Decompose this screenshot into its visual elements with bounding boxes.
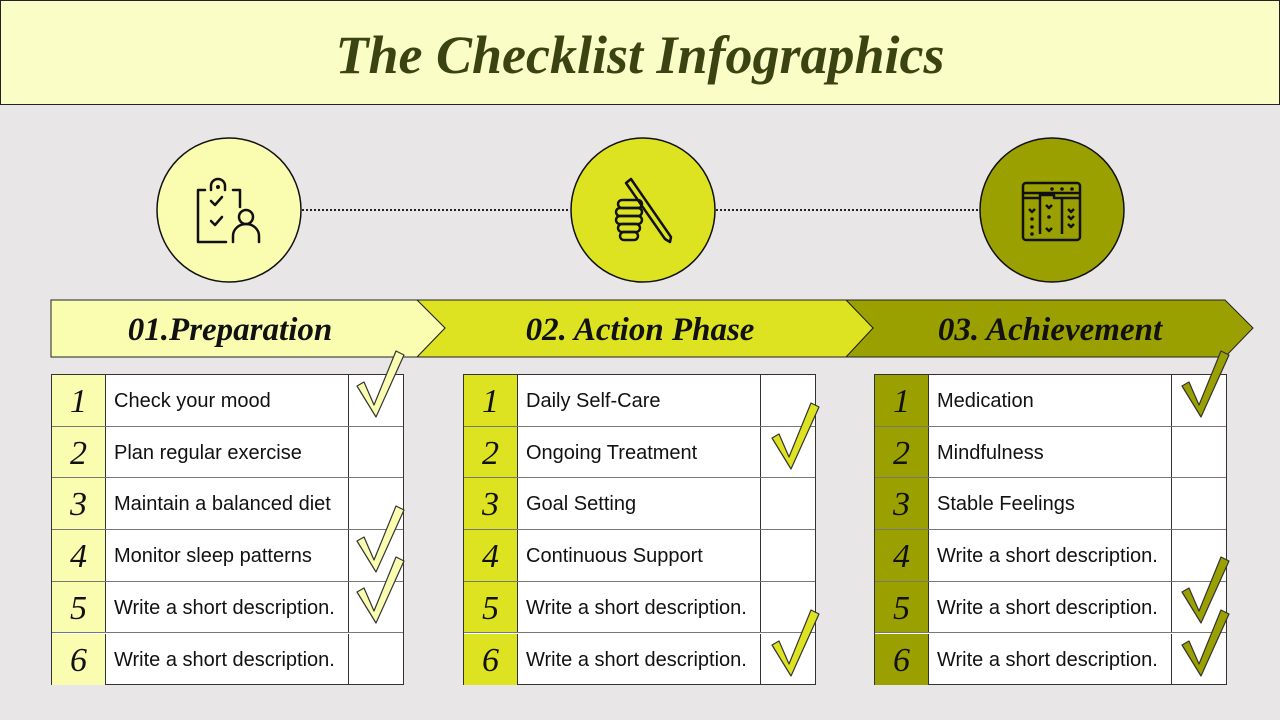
- circle 1 with icon: clipboard person: [157, 138, 301, 282]
- arrow segment 1: [51, 300, 445, 357]
- title banner: The Checklist Infographics: [335, 25, 945, 85]
- table 3: achievement: Write a short description.: [937, 597, 1158, 619]
- table 1: preparation: Check your mood: [114, 390, 271, 412]
- table 2: action phase: Write a short description.: [526, 648, 747, 670]
- table 3: achievement: Write a short description.: [937, 545, 1158, 567]
- table 3: achievement: 4: [893, 538, 910, 575]
- table 1: preparation: Maintain a balanced diet: [114, 493, 331, 515]
- table 3: achievement: Medication: [937, 390, 1034, 412]
- table 2: action phase: Write a short description.: [526, 597, 747, 619]
- table 2: action phase: 1: [482, 383, 499, 420]
- table 3: achievement: [874, 374, 1227, 685]
- heading 3: 03. Achievement: [938, 312, 1162, 348]
- table 2: action phase: 6: [482, 642, 499, 678]
- table 1: preparation: 6: [70, 642, 87, 678]
- table 2: action phase: [463, 374, 816, 685]
- heading 1: 01.Preparation: [128, 312, 332, 348]
- table 3: achievement: Mindfulness: [937, 442, 1044, 464]
- table 2: action phase: 5: [482, 590, 499, 627]
- arrow segment 2: [417, 300, 873, 357]
- table 1: preparation: 1: [70, 383, 87, 420]
- table 1: preparation: 5: [70, 590, 87, 627]
- table 3: achievement: Write a short description.: [937, 648, 1158, 670]
- table 3: achievement: Stable Feelings: [937, 493, 1075, 515]
- table 1: preparation: Monitor sleep patterns: [114, 545, 312, 567]
- table 1: preparation: Write a short description.: [114, 648, 335, 670]
- circle 2 with icon: hand with pen: [571, 138, 715, 282]
- table 2: action phase: Ongoing Treatment: [526, 442, 697, 464]
- table 1: preparation: [51, 374, 404, 685]
- table 2: action phase: Continuous Support: [526, 545, 703, 567]
- table 2: action phase: 4: [482, 538, 499, 575]
- table 1: preparation: 2: [70, 435, 87, 472]
- table 1: preparation: Write a short description.: [114, 597, 335, 619]
- table 2: action phase: 3: [482, 486, 499, 523]
- circle 3 with icon: checklist board: [980, 138, 1124, 282]
- table 1: preparation: 4: [70, 538, 87, 575]
- table 3: achievement: 3: [893, 486, 910, 523]
- table 2: action phase: Daily Self-Care: [526, 390, 660, 412]
- table 2: action phase: 2: [482, 435, 499, 472]
- table 3: achievement: 6: [893, 642, 910, 678]
- title banner: [0, 0, 1280, 105]
- heading 2: 02. Action Phase: [526, 312, 754, 348]
- table 3: achievement: 2: [893, 435, 910, 472]
- table 1: preparation: 3: [70, 486, 87, 523]
- arrow segment 3: [846, 300, 1253, 357]
- table 3: achievement: 5: [893, 590, 910, 627]
- table 2: action phase: Goal Setting: [526, 493, 636, 515]
- table 1: preparation: Plan regular exercise: [114, 442, 302, 464]
- table 3: achievement: 1: [893, 383, 910, 420]
- connector dotted line: [302, 209, 979, 211]
